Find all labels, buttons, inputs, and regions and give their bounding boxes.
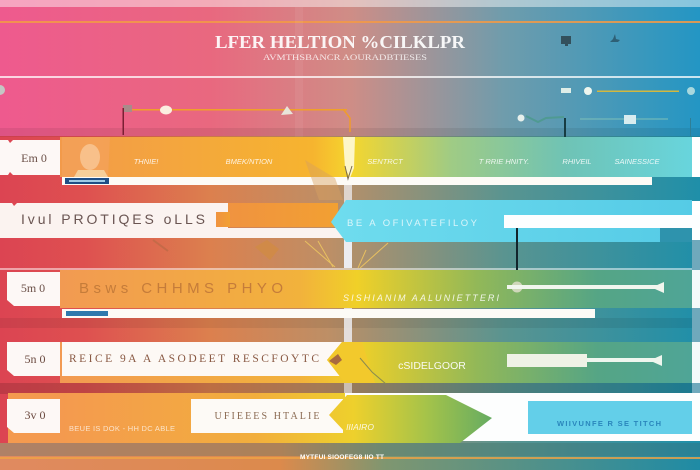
title: LFER HELTION %CILKLPR — [215, 32, 465, 52]
icon: portrait — [62, 137, 110, 177]
row 3 heading: Bsws CHHMS PHYO — [79, 280, 283, 297]
row 4 chevron — [327, 342, 386, 384]
cyan callout: WIIVUNFE R SE TITCH — [557, 419, 661, 428]
panel: row 2 — [0, 200, 700, 272]
row 4 caption: cSIDELGOOR — [398, 360, 466, 372]
footer text: MYTFUI SIOOFEG8 IIO TT — [300, 454, 384, 461]
background: upper header gradient — [0, 0, 700, 136]
panel: row 1 band: SENTRCT — [367, 157, 404, 166]
row 4 label: 5n 0 — [24, 352, 46, 366]
row 4 slider — [507, 354, 662, 367]
row 3 slider — [507, 282, 664, 293]
green arrow: IIIAIRO — [346, 422, 374, 432]
white bar: row 1 — [62, 177, 652, 185]
icons: header right — [561, 34, 620, 46]
panel: row 2: BE A OFIVATEFILOY — [347, 218, 478, 229]
row 4 white heading panel: REICE 9A A ASODEET RESCFOYTC — [69, 353, 319, 365]
decoration: center spike — [305, 137, 355, 200]
panel: row 5 — [7, 393, 700, 443]
timeline: upper right — [561, 87, 695, 95]
decoration: shards — [153, 240, 388, 268]
row 5 white panel: UFIEEES HTALIE — [214, 411, 320, 422]
panel: row 1 band: SAINESSICE — [614, 157, 661, 166]
row 2 heading: Ivul PROTIQES oLLS — [21, 211, 205, 227]
row 5 white panel — [191, 399, 343, 433]
background: lower gradient — [0, 136, 700, 470]
panel: row 1 band: BMEK/NTION — [226, 157, 273, 166]
row 1 label: Em 0 — [21, 151, 47, 165]
green arrow — [329, 395, 492, 443]
cyan arrow panel — [331, 200, 692, 242]
row 1 label — [0, 140, 60, 175]
panel: row 1 band — [0, 137, 692, 177]
panel: row 1 band: T RRIE HNITY. — [479, 157, 529, 166]
row 4 white heading panel — [62, 342, 342, 376]
row 3 label — [7, 272, 60, 306]
row 3 label: 5m 0 — [21, 281, 45, 295]
center divider segments — [344, 185, 352, 394]
panel: row 1 band: RHIVEIL — [562, 157, 592, 166]
left marker dot — [0, 85, 5, 95]
right edge strips — [692, 137, 700, 393]
panel: row 3 — [7, 270, 692, 308]
cyan callout — [528, 401, 692, 434]
subtitle: AVMTHSBANCR AOURADBTIESES — [263, 52, 427, 62]
footer band — [0, 443, 700, 470]
row 5 label: 3v 0 — [24, 408, 46, 422]
timeline: right connector — [518, 114, 691, 152]
white bar: row 3 — [62, 309, 595, 318]
row 5 label — [7, 399, 60, 433]
row 5 caption: BEUE IS DOK - HH DC ABLE — [69, 424, 175, 433]
panel: row 4 — [7, 342, 692, 384]
row 4 label — [7, 342, 60, 376]
timeline: left connector — [122, 105, 350, 135]
row 3 caption: SISHIANIM AALUNIETTERI — [343, 293, 499, 303]
row 1 labels: THNIE! — [134, 157, 159, 166]
